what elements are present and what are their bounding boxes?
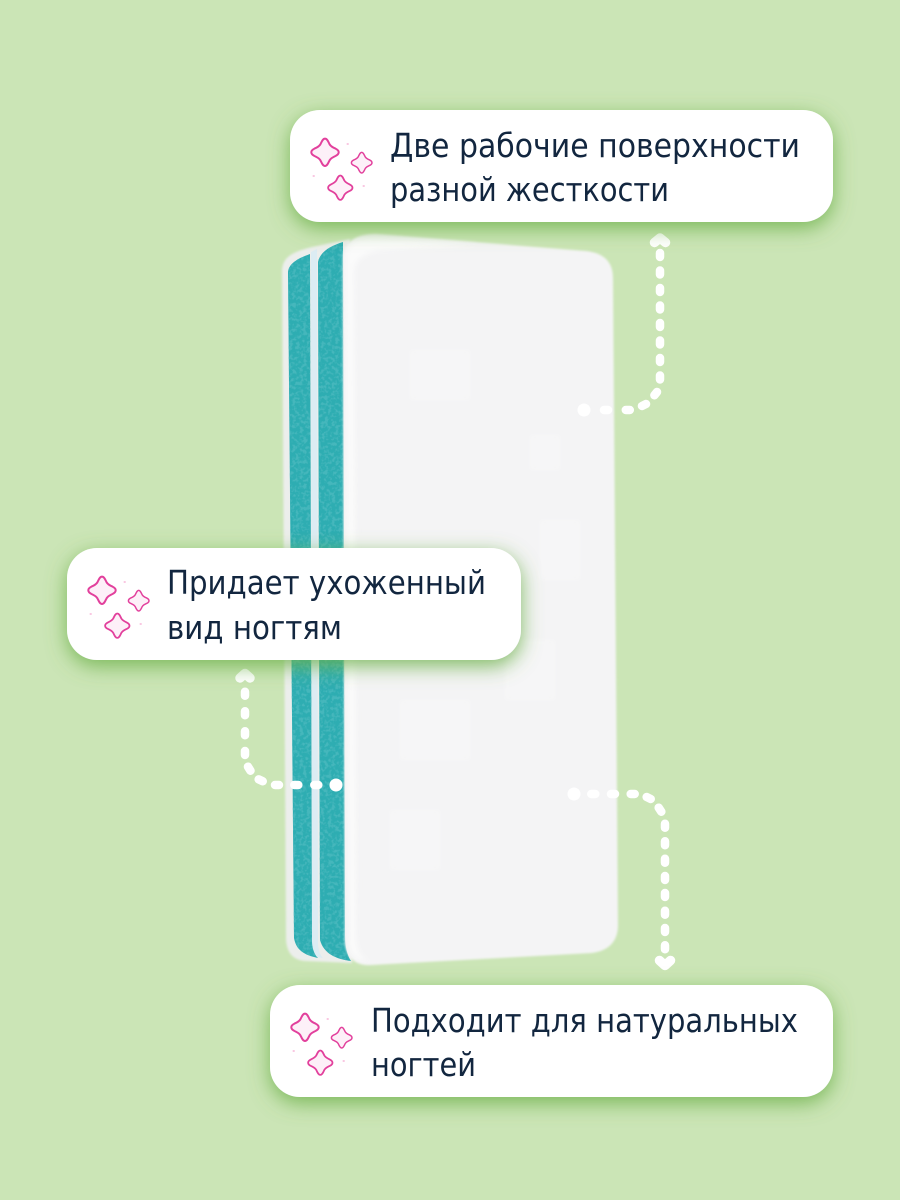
icon: sparkles [311, 139, 372, 200]
icon: sparkles [88, 577, 149, 638]
callout: two working surfaces: разной жесткости [390, 170, 669, 209]
callout text: Подходит для натуральных [371, 1001, 798, 1040]
arrow: left dotted connector [240, 674, 342, 792]
callout: suitable for natural nails [270, 985, 833, 1097]
icon: sparkles [291, 1014, 352, 1075]
front face highlights [346, 237, 580, 962]
callout text: Придает ухоженный [167, 563, 486, 602]
sponge buffer product [282, 234, 618, 965]
callout: suitable for natural nails: ногтей [371, 1045, 476, 1084]
callout: well-groomed nails: вид ногтям [167, 608, 342, 647]
arrow: top dotted connector [578, 238, 666, 416]
teal abrasive strip: outer [288, 254, 318, 958]
outer white shell [282, 239, 352, 963]
white front face [343, 234, 618, 965]
white separator [311, 249, 323, 958]
callout: two working surfaces [290, 110, 833, 222]
arrow: bottom dotted connector [568, 788, 670, 966]
teal abrasive strip: inner [318, 242, 351, 961]
callout text: Две рабочие поверхности [390, 126, 800, 165]
callout: well-groomed nails [67, 548, 521, 660]
